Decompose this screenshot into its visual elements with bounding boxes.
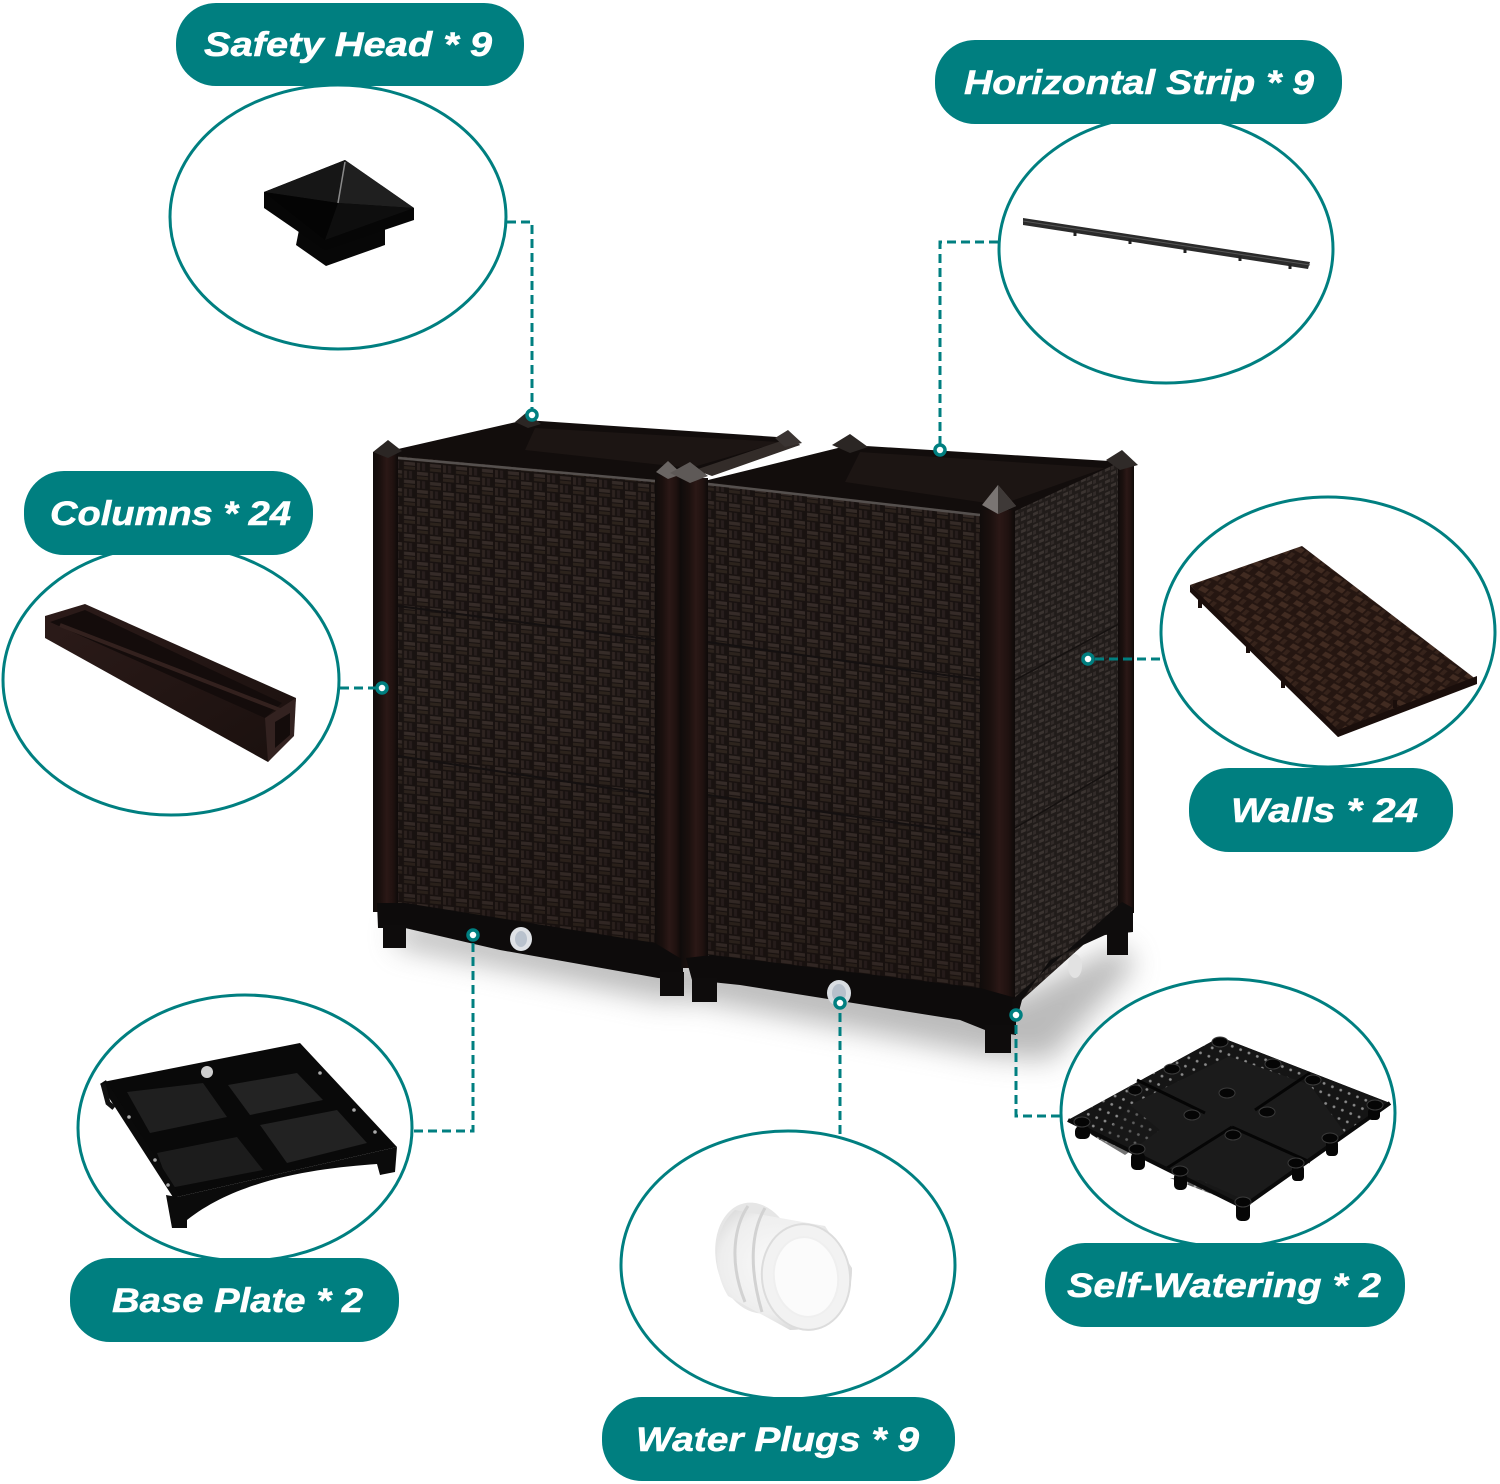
circle: columns [3, 545, 339, 815]
circle: water plugs [621, 1131, 955, 1399]
connector: walls [1088, 658, 1160, 660]
icon: horizontal strip [1023, 218, 1310, 269]
label: Water Plugs: Water Plugs * 9 [636, 1421, 919, 1459]
icon: base plate [103, 1043, 397, 1228]
label: Safety Head: Safety Head * 9 [204, 26, 492, 64]
label: Columns: Columns * 24 [50, 495, 291, 533]
label: Base Plate [70, 1258, 399, 1342]
icon: water plug [705, 1195, 857, 1336]
circle: horizontal strip [999, 115, 1333, 383]
connector: horizontal strip [940, 242, 998, 450]
icon: safety head cap [264, 160, 414, 266]
label: Walls [1189, 768, 1453, 852]
label: Self-Watering [1045, 1243, 1405, 1327]
label: Horizontal Strip: Horizontal Strip * 9 [964, 64, 1314, 102]
ground shadow [395, 920, 1135, 1060]
icon: wall panel [1190, 546, 1477, 737]
circle: walls [1161, 497, 1495, 767]
label: Self-Watering: Self-Watering * 2 [1067, 1267, 1381, 1305]
circle: safety head [170, 85, 506, 349]
label: Columns [24, 471, 313, 555]
label: Base Plate: Base Plate * 2 [112, 1282, 363, 1320]
connector: safety head [507, 222, 532, 415]
connector dots [377, 410, 1093, 1020]
connector: columns [340, 686, 382, 690]
planter: left box [373, 412, 802, 996]
label: Water Plugs [602, 1397, 955, 1481]
label: Walls: Walls * 24 [1231, 792, 1418, 830]
connector: base plate [414, 935, 473, 1131]
connector: self-watering [1016, 1015, 1060, 1116]
planter: right box [670, 434, 1138, 1053]
icon: column [45, 604, 296, 762]
circle: base plate [78, 995, 412, 1261]
connector: water plugs [838, 1003, 842, 1134]
label: Safety Head [176, 3, 524, 86]
icon: self-watering tray [1068, 1037, 1390, 1221]
circle: self-watering [1061, 979, 1395, 1247]
label: Horizontal Strip [935, 40, 1342, 124]
